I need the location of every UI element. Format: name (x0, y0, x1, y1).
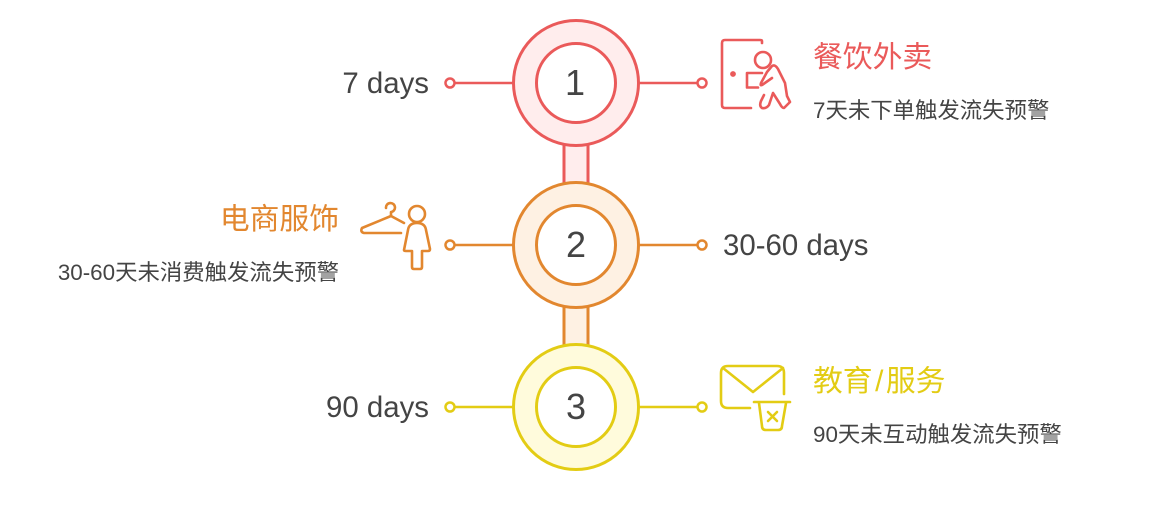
step 2 node: 2 (566, 224, 586, 265)
icon: envelope and trash bin (721, 366, 790, 430)
step 2 node (446, 182, 706, 308)
icon: hanger and dress figure (361, 203, 430, 269)
description: food delivery: 7天未下单触发流失预警 (813, 98, 1049, 123)
heading: education and services: 教育/服务 (813, 365, 945, 398)
connector: step 1 to 2 (564, 140, 588, 186)
heading: food delivery: 餐饮外卖 (813, 41, 932, 74)
label: 90 days: 90 days (326, 391, 429, 424)
connector: step 2 to 3 (564, 302, 588, 348)
label: 30-60 days: 30-60 days (723, 229, 868, 262)
step 3 node (446, 344, 706, 470)
description: e-commerce apparel: 30-60天未消费触发流失预警 (58, 260, 339, 285)
heading: e-commerce apparel: 电商服饰 (220, 203, 339, 236)
step 1 node (446, 20, 706, 146)
step 3 node: 3 (566, 386, 586, 427)
step 1 node: 1 (565, 62, 585, 103)
description: education and services: 90天未互动触发流失预警 (813, 422, 1062, 447)
label: 7 days: 7 days (342, 67, 429, 100)
icon: delivery courier at door (722, 40, 790, 108)
